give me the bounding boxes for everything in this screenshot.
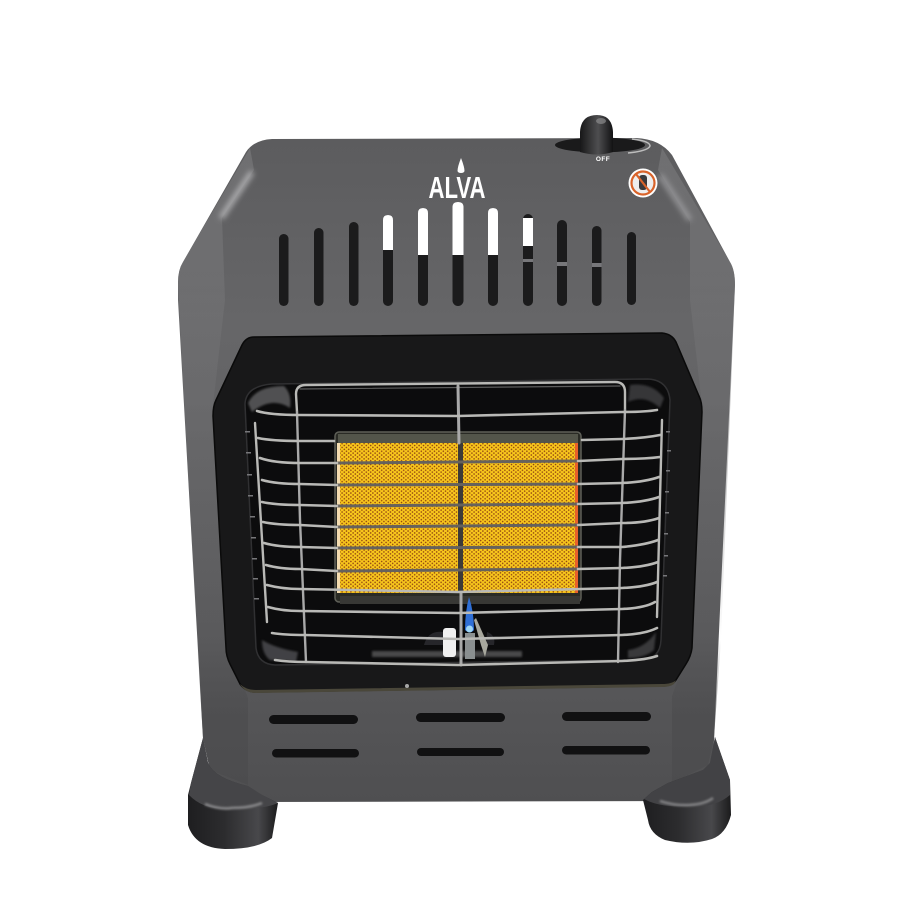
knob xyxy=(580,115,613,154)
foot highlight xyxy=(205,803,262,808)
left lower side xyxy=(197,640,248,785)
left shoulder xyxy=(178,148,254,640)
recess glare xyxy=(248,385,664,662)
knob recess xyxy=(555,138,645,152)
black front bezel xyxy=(213,333,702,692)
left foot xyxy=(188,738,278,849)
centre vertical wire xyxy=(458,386,461,665)
centre divider xyxy=(458,443,463,593)
wires over plate xyxy=(337,461,578,571)
foot highlight xyxy=(660,798,713,805)
ceramic plate xyxy=(337,443,578,593)
control knob xyxy=(555,115,650,163)
wordmark: ALVA xyxy=(428,170,486,205)
blue flame xyxy=(465,597,474,632)
top frame inner wire xyxy=(300,386,620,389)
tray reflection xyxy=(372,651,522,657)
right highlight xyxy=(660,175,690,220)
burner base and pilot xyxy=(372,597,522,659)
chrome wire guard xyxy=(255,382,662,665)
top vent slots xyxy=(279,202,636,306)
body side facets xyxy=(178,148,735,785)
igniter xyxy=(443,628,456,657)
burner blobs xyxy=(424,632,443,645)
right foot xyxy=(643,737,731,843)
flame xyxy=(458,158,464,173)
heater body xyxy=(178,138,735,802)
window through vents xyxy=(383,202,533,255)
firebox recess xyxy=(245,379,670,665)
right lower side xyxy=(672,640,721,783)
right vertical wire xyxy=(618,410,625,662)
burner lower rail xyxy=(340,596,580,604)
left side bar xyxy=(255,423,267,622)
ceramic burner xyxy=(335,432,581,604)
foot top surface xyxy=(644,737,730,806)
off label: OFF xyxy=(596,156,610,163)
bezel lower lip xyxy=(240,680,676,693)
right side bar xyxy=(657,420,662,617)
lower vent slots xyxy=(269,712,651,758)
left highlight xyxy=(221,172,252,218)
burner frame xyxy=(335,432,581,602)
pilot assembly xyxy=(465,633,475,659)
left vertical wire xyxy=(297,412,306,662)
top frame xyxy=(296,382,625,412)
horizontal wires outside burner xyxy=(257,410,657,416)
burner top lip xyxy=(338,434,578,443)
brand logo xyxy=(428,158,486,205)
bezel clips xyxy=(245,431,671,688)
foot top surface xyxy=(189,738,278,809)
right shoulder xyxy=(658,148,735,640)
warning icon xyxy=(628,168,658,198)
